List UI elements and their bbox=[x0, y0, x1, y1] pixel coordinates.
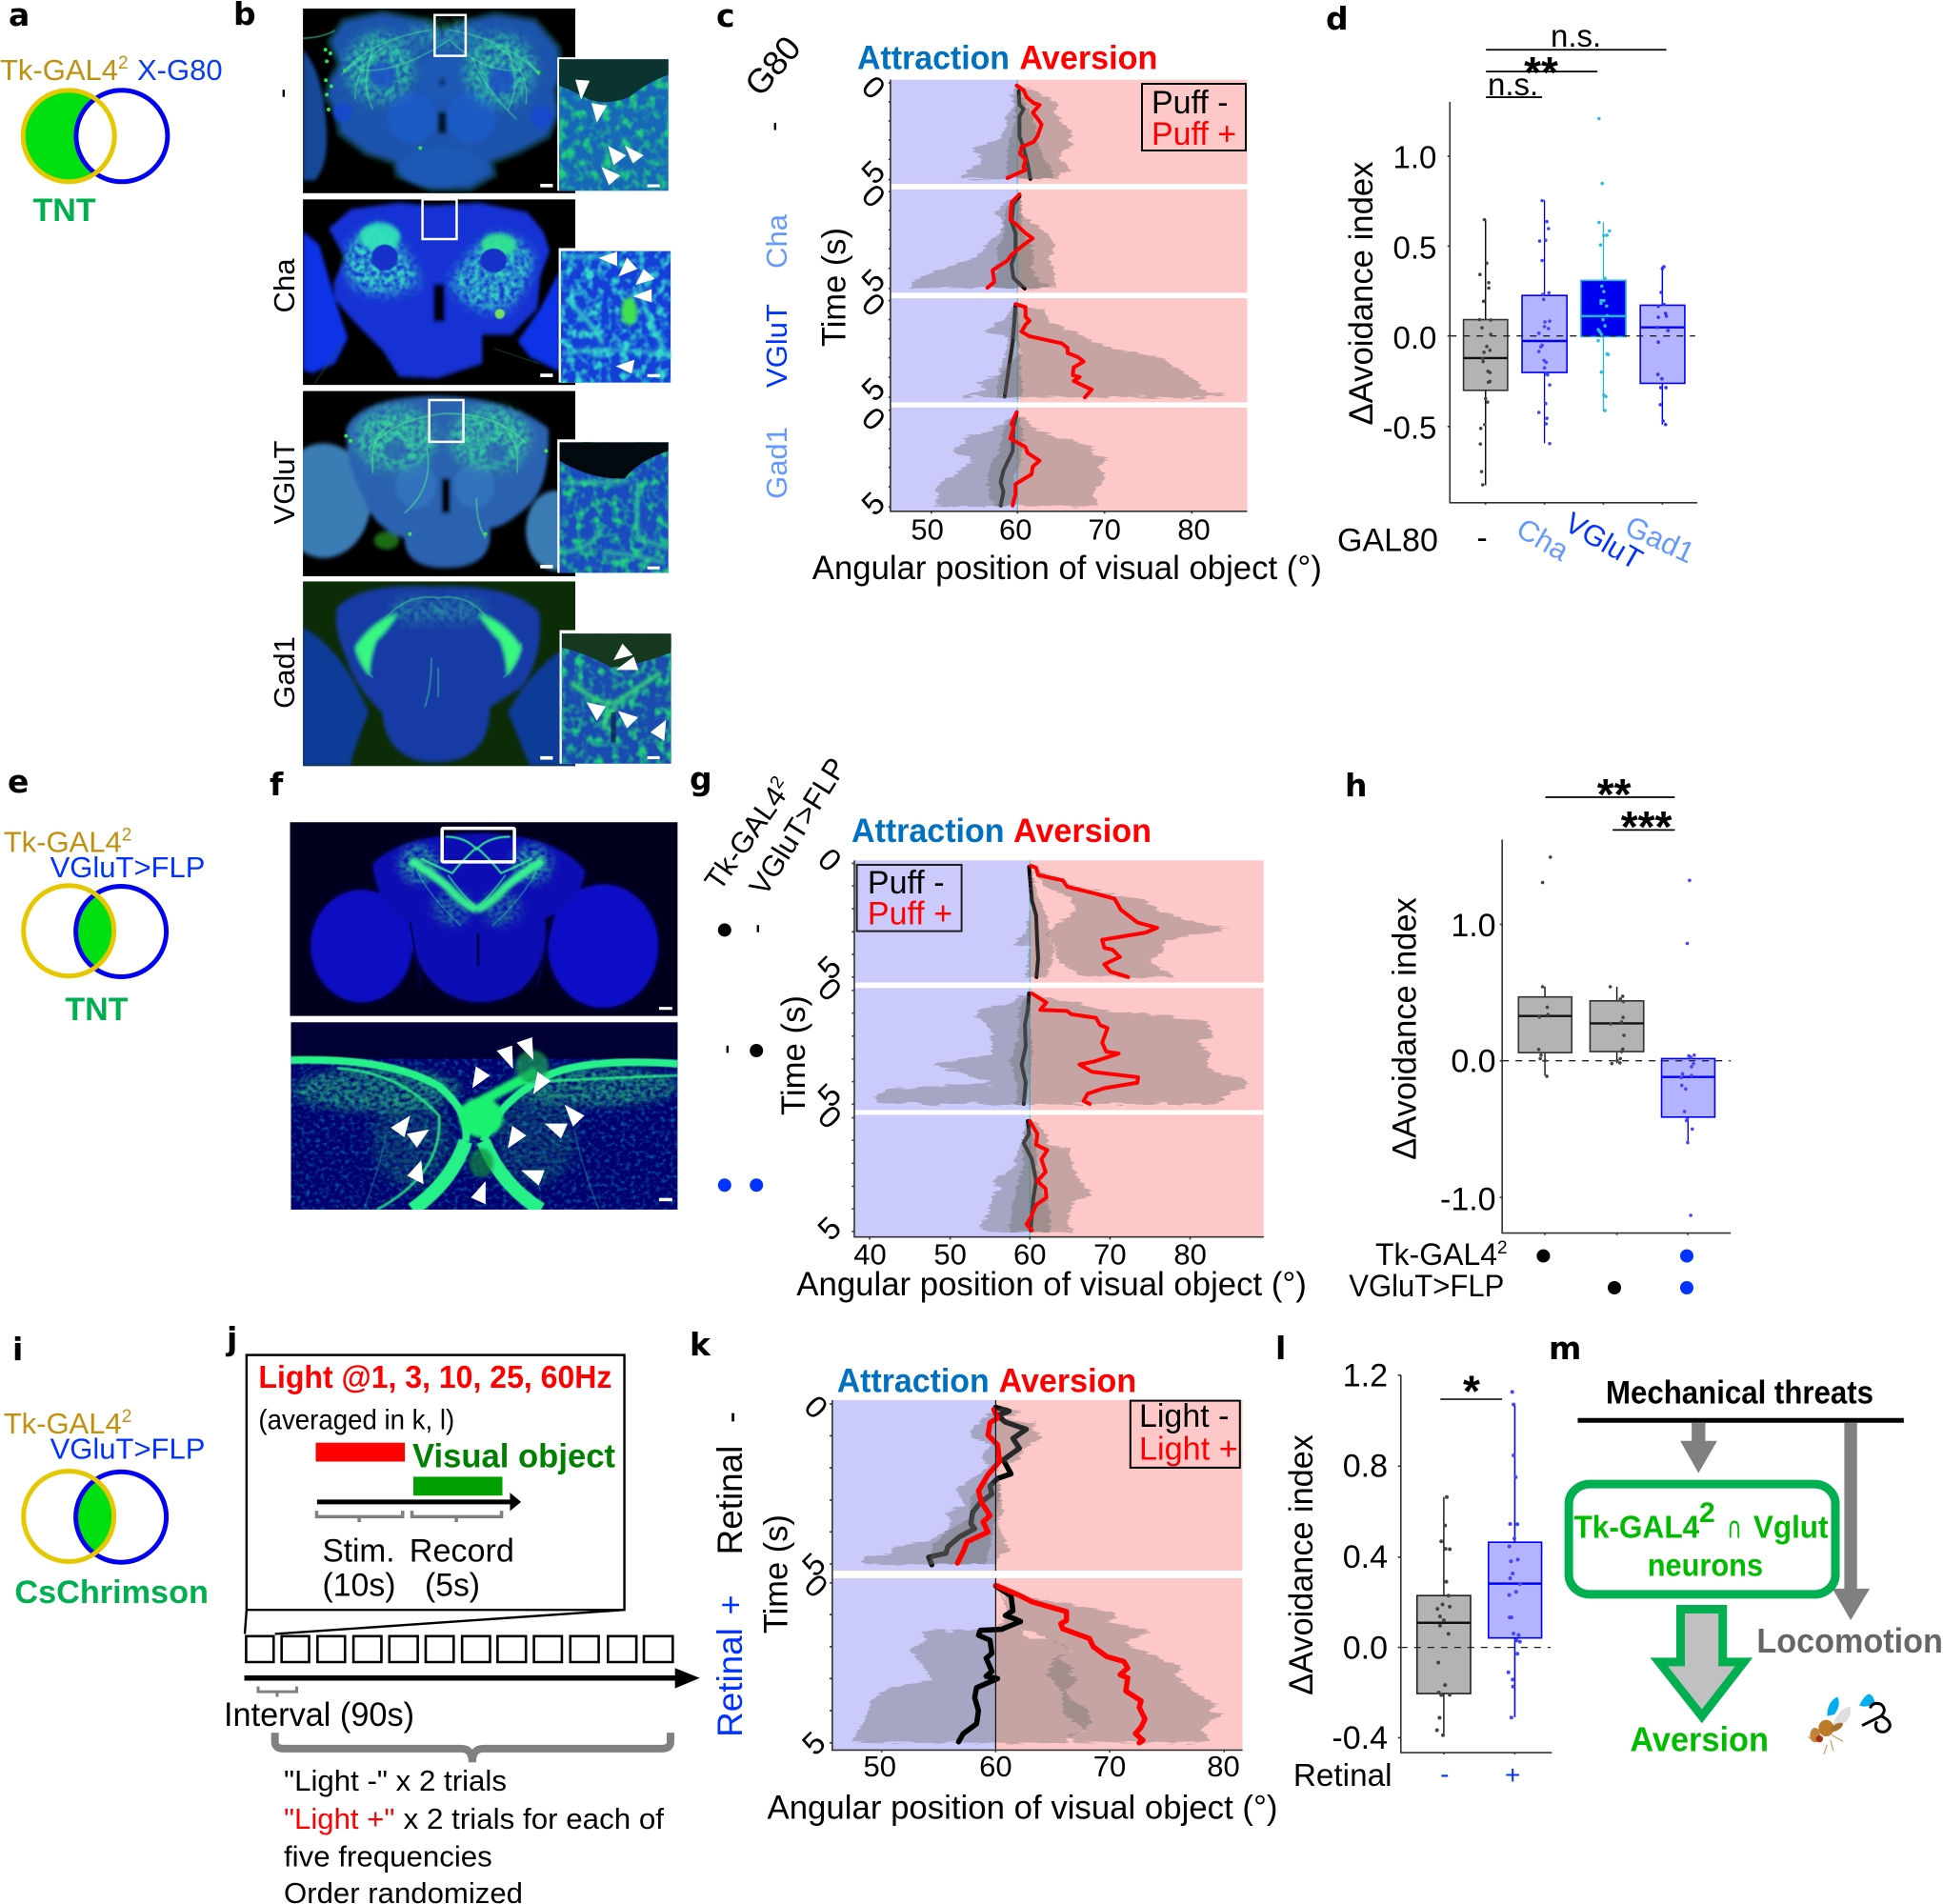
x tick labels bbox=[853, 1237, 1207, 1271]
genotype dots bbox=[709, 923, 772, 1192]
row labels: retinal: Retinal bbox=[711, 1628, 750, 1737]
genotype rows: Tk-GAL4 bbox=[1375, 1237, 1497, 1272]
y tick labels: 0.0 bbox=[1343, 1630, 1388, 1666]
genotype labels bbox=[1337, 506, 1700, 576]
title: aversion: Aversion bbox=[999, 1362, 1136, 1399]
x axis title: Angular position of visual object (°) bbox=[796, 1266, 1307, 1303]
venn yellow circle bbox=[23, 90, 114, 182]
x tick labels: 80 bbox=[1207, 1750, 1240, 1783]
trial description: x 2 trials for each of bbox=[404, 1802, 664, 1835]
x tick labels bbox=[863, 1750, 1240, 1783]
y axis title: ΔAvoidance index bbox=[1387, 897, 1423, 1160]
y tick labels: 5 bbox=[854, 485, 891, 522]
row labels: retinal: + bbox=[711, 1594, 750, 1615]
genotype header labels: VGluT>FLP bbox=[743, 752, 853, 901]
y tick labels: 5 bbox=[811, 1076, 848, 1113]
label: CsChrimson: CsChrimson bbox=[14, 1574, 209, 1611]
significance labels bbox=[1597, 770, 1673, 852]
label: Tk-GAL4 2: 2 bbox=[118, 53, 129, 73]
row labels: Gad1 bbox=[268, 636, 301, 709]
genotype rows: VGluT>FLP bbox=[1349, 1269, 1504, 1303]
genotype labels: VGluT bbox=[1559, 506, 1649, 576]
genotype labels: - bbox=[1476, 520, 1488, 556]
brain image: Cha bbox=[303, 199, 575, 385]
row labels: G80 genotypes: - bbox=[756, 122, 790, 131]
x tick labels: 70 bbox=[1093, 1237, 1127, 1271]
row labels: G80 genotypes bbox=[737, 29, 809, 499]
panel label i: i bbox=[12, 1331, 23, 1368]
y tick labels: 0 bbox=[811, 841, 849, 878]
panel l: box plot bbox=[1283, 1358, 1552, 1793]
legend: puff: Puff + bbox=[868, 895, 952, 932]
y tick labels bbox=[795, 1389, 835, 1762]
neurons box label: Vglut bbox=[1753, 1509, 1829, 1545]
x tick labels: 60 bbox=[1013, 1237, 1047, 1271]
protocol title: Light @1, 3, 10, 25, 60Hz bbox=[258, 1359, 611, 1394]
y tick labels bbox=[1440, 908, 1496, 1217]
title: attraction: Attraction bbox=[851, 812, 1004, 850]
row labels: Cha bbox=[268, 258, 301, 312]
title: aversion: Aversion bbox=[1019, 40, 1157, 77]
interval label: Interval (90s) bbox=[224, 1696, 414, 1734]
stim and record labels: Stim. bbox=[322, 1533, 394, 1569]
label: TNT: TNT bbox=[65, 992, 129, 1028]
y tick labels: 5 bbox=[811, 949, 848, 986]
y tick labels: 0 bbox=[855, 400, 892, 437]
panel a: intersection venn bbox=[0, 53, 223, 229]
x tick labels: 60 bbox=[999, 513, 1032, 547]
significance labels: n.s. bbox=[1551, 18, 1601, 53]
y tick labels: 0.4 bbox=[1343, 1539, 1388, 1575]
x axis title: Angular position of visual object (°) bbox=[812, 550, 1322, 587]
zoomed image bbox=[290, 1022, 678, 1210]
genotype rows bbox=[1349, 1237, 1693, 1303]
panel j: stimulation protocol bbox=[224, 1355, 700, 1904]
row labels: VGluT bbox=[268, 441, 301, 524]
stim and record labels bbox=[322, 1533, 514, 1604]
model shapes bbox=[1569, 1420, 1904, 1716]
significance labels bbox=[1488, 18, 1601, 102]
y axis title: Time (s) bbox=[757, 1514, 794, 1633]
y axis title: ΔAvoidance index bbox=[1343, 161, 1380, 425]
panel m: circuit model bbox=[1569, 1375, 1943, 1758]
stim and record labels: Record bbox=[410, 1533, 514, 1569]
heading: mechanical threats: Mechanical threats bbox=[1606, 1375, 1873, 1412]
venn green lens bbox=[76, 1480, 114, 1553]
neurons box label: 2 bbox=[1699, 1497, 1715, 1529]
whole brain image bbox=[290, 822, 677, 1016]
retinal row: + bbox=[1505, 1760, 1520, 1790]
significance labels: ** bbox=[1597, 770, 1632, 819]
panel label m: m bbox=[1549, 1330, 1581, 1367]
panel k: trajectory plots bbox=[711, 1362, 1278, 1827]
venn yellow circle bbox=[24, 1471, 114, 1562]
y tick labels: 5 bbox=[795, 1546, 832, 1583]
legend: puff bbox=[1142, 84, 1246, 152]
icon: fly with air puff bbox=[1808, 1694, 1890, 1754]
protocol shapes bbox=[245, 1355, 700, 1762]
boxes bbox=[1448, 50, 1697, 505]
white zoom box bbox=[442, 829, 514, 862]
panel label e: e bbox=[8, 763, 29, 800]
legend: puff: Puff + bbox=[1152, 116, 1236, 152]
white zoom box bbox=[423, 199, 456, 239]
row labels: retinal: - bbox=[711, 1412, 750, 1423]
label: aversion: Aversion bbox=[1630, 1720, 1769, 1758]
inset 4 bbox=[560, 631, 671, 764]
panel f: confocal images bbox=[290, 822, 678, 1210]
legend: light bbox=[1131, 1398, 1240, 1468]
y tick labels: 0 bbox=[855, 286, 892, 323]
legend: light: Light - bbox=[1139, 1398, 1229, 1434]
row labels: - bbox=[265, 89, 298, 98]
y tick labels: 5 bbox=[854, 153, 891, 190]
label: TNT: TNT bbox=[32, 192, 96, 229]
genotype dots: - bbox=[709, 1044, 742, 1054]
significance labels: ** bbox=[1524, 48, 1558, 97]
y tick labels bbox=[1332, 1358, 1388, 1756]
y tick labels: 0 bbox=[855, 177, 892, 214]
white arrowheads bbox=[391, 1037, 585, 1204]
y tick labels: 5 bbox=[854, 262, 891, 299]
brain image: VGluT bbox=[303, 391, 575, 577]
row labels bbox=[265, 89, 301, 709]
y tick labels: 0.0 bbox=[1393, 320, 1436, 355]
panel g: trajectory plots bbox=[698, 752, 1307, 1303]
y tick labels: 0 bbox=[811, 1098, 849, 1135]
panel i: intersection venn bbox=[4, 1407, 209, 1611]
venn green lens bbox=[76, 894, 114, 968]
brain images bbox=[276, 9, 671, 766]
neurons box label bbox=[1573, 1497, 1829, 1583]
y tick labels: 0 bbox=[811, 971, 849, 1008]
stim and record labels: (10s) bbox=[322, 1568, 396, 1604]
panel h: box plot bbox=[1349, 770, 1731, 1303]
title: attraction: Attraction bbox=[857, 40, 1010, 77]
genotype header labels: 2 bbox=[767, 772, 789, 792]
panel label h: h bbox=[1345, 767, 1368, 804]
neurons box label: neurons bbox=[1648, 1547, 1763, 1583]
y tick labels: 0.8 bbox=[1343, 1449, 1388, 1485]
x tick labels: 50 bbox=[911, 513, 944, 547]
x tick labels: 60 bbox=[979, 1750, 1012, 1783]
panel b: confocal brain images bbox=[265, 9, 671, 766]
x tick labels: 70 bbox=[1093, 1750, 1126, 1783]
y axis title: Time (s) bbox=[815, 228, 852, 347]
trial description bbox=[284, 1764, 664, 1904]
panel label g: g bbox=[690, 760, 712, 797]
genotype header labels: Tk-GAL4 bbox=[698, 780, 792, 896]
plot area bbox=[889, 80, 1247, 513]
venn yellow circle bbox=[24, 886, 114, 976]
neurons box label: Tk-GAL4 bbox=[1573, 1509, 1700, 1545]
significance labels: *** bbox=[1621, 802, 1673, 852]
label: Tk-GAL4 2: Tk-GAL4 bbox=[4, 1407, 122, 1440]
white zoom box bbox=[434, 15, 466, 56]
plot area bbox=[851, 860, 1264, 1239]
panel label d: d bbox=[1326, 0, 1349, 37]
x axis title: Angular position of visual object (°) bbox=[768, 1789, 1278, 1827]
y tick labels: -0.5 bbox=[1383, 410, 1436, 445]
x tick labels: 50 bbox=[863, 1750, 896, 1783]
legend: puff: Puff - bbox=[868, 865, 945, 901]
y tick labels: 0 bbox=[797, 1567, 835, 1604]
boxes bbox=[1500, 797, 1731, 1235]
inset 3 bbox=[557, 439, 669, 572]
panel c: trajectory plots bbox=[737, 29, 1322, 587]
trial description: five frequencies bbox=[284, 1839, 492, 1873]
row labels: G80 genotypes: Cha bbox=[760, 213, 793, 269]
significance labels: n.s. bbox=[1488, 67, 1538, 102]
panel label k: k bbox=[690, 1326, 711, 1363]
y tick labels: 1.0 bbox=[1393, 139, 1436, 174]
panel e: intersection venn bbox=[4, 825, 205, 1028]
row labels: G80 genotypes: VGluT bbox=[760, 304, 793, 388]
genotype labels: Gad1 bbox=[1620, 510, 1700, 570]
legend: puff bbox=[857, 865, 962, 932]
significance label: * bbox=[1463, 1367, 1480, 1416]
brain image: no G80 bbox=[303, 9, 575, 193]
y tick labels bbox=[1383, 139, 1436, 445]
y tick labels: 1.2 bbox=[1343, 1358, 1388, 1394]
y axis title: ΔAvoidance index bbox=[1283, 1434, 1320, 1695]
label: VGluT>FLP: VGluT>FLP bbox=[50, 1432, 205, 1465]
legend: puff: Puff - bbox=[1152, 85, 1229, 121]
retinal row bbox=[1293, 1757, 1520, 1793]
label: Tk-GAL4 2: 2 bbox=[122, 1407, 131, 1427]
row labels: retinal: Retinal bbox=[711, 1446, 750, 1554]
y tick labels: 0 bbox=[797, 1389, 835, 1426]
trial description: "Light +" bbox=[284, 1802, 394, 1835]
x tick labels: 80 bbox=[1177, 513, 1211, 547]
y axis title: Time (s) bbox=[775, 995, 812, 1115]
label: Tk-GAL4 2: Tk-GAL4 bbox=[4, 825, 122, 859]
y tick labels: 0.0 bbox=[1451, 1044, 1496, 1080]
genotype dots: - bbox=[739, 924, 772, 933]
trial description: "Light -" x 2 trials bbox=[284, 1764, 507, 1797]
title: aversion: Aversion bbox=[1013, 812, 1152, 850]
venn blue circle bbox=[76, 90, 168, 182]
venn green crescent bbox=[23, 90, 95, 182]
boxes bbox=[1398, 1375, 1552, 1754]
y tick labels: -0.4 bbox=[1332, 1720, 1388, 1756]
label: Tk-GAL4 2: 2 bbox=[122, 825, 131, 846]
x tick labels: 80 bbox=[1173, 1237, 1207, 1271]
y tick labels bbox=[854, 69, 892, 522]
x tick labels: 40 bbox=[853, 1237, 887, 1271]
brain image: Gad1 bbox=[303, 581, 575, 766]
y tick labels bbox=[811, 841, 849, 1247]
genotype rows: 2 bbox=[1497, 1238, 1508, 1258]
venn blue circle bbox=[76, 886, 167, 977]
title: attraction: Attraction bbox=[837, 1362, 990, 1399]
row labels: G80 genotypes: Gad1 bbox=[760, 427, 793, 499]
genotype labels: Cha bbox=[1511, 511, 1575, 568]
label: Tk-GAL4 2: Tk-GAL4 bbox=[0, 53, 118, 87]
y tick labels: 1.0 bbox=[1451, 908, 1496, 944]
visual object label: Visual object bbox=[412, 1438, 615, 1475]
label: X-G80: X-G80 bbox=[137, 53, 223, 87]
panel label l: l bbox=[1275, 1330, 1286, 1367]
inset 1 bbox=[557, 57, 669, 190]
x tick labels bbox=[911, 513, 1211, 547]
white zoom box bbox=[430, 400, 464, 442]
panel label f: f bbox=[270, 766, 284, 803]
y tick labels: 0 bbox=[855, 69, 892, 106]
averaged note: (averaged in k, l) bbox=[258, 1405, 454, 1436]
stim and record labels: (5s) bbox=[425, 1568, 480, 1604]
panel d: box plot bbox=[1337, 18, 1700, 576]
panel label j: j bbox=[225, 1320, 237, 1357]
neurons box label: ∩ bbox=[1727, 1511, 1742, 1545]
y tick labels: 5 bbox=[795, 1725, 832, 1762]
legend: light: Light + bbox=[1139, 1432, 1238, 1468]
y tick labels: -1.0 bbox=[1440, 1181, 1496, 1217]
label: VGluT>FLP: VGluT>FLP bbox=[50, 851, 205, 884]
row labels: G80 genotypes: G80 bbox=[737, 29, 809, 103]
y tick labels: 5 bbox=[811, 1210, 848, 1247]
plot area bbox=[830, 1400, 1243, 1753]
row labels: retinal bbox=[711, 1412, 750, 1737]
venn blue circle bbox=[76, 1472, 167, 1562]
y tick labels: 5 bbox=[854, 371, 891, 408]
x tick labels: 50 bbox=[933, 1237, 967, 1271]
y tick labels: 0.5 bbox=[1393, 230, 1436, 265]
inset 2 bbox=[559, 248, 671, 383]
retinal row: - bbox=[1440, 1759, 1449, 1789]
retinal row: Retinal bbox=[1293, 1757, 1392, 1793]
x tick labels: 70 bbox=[1088, 513, 1121, 547]
genotype labels: GAL80 bbox=[1337, 522, 1438, 558]
